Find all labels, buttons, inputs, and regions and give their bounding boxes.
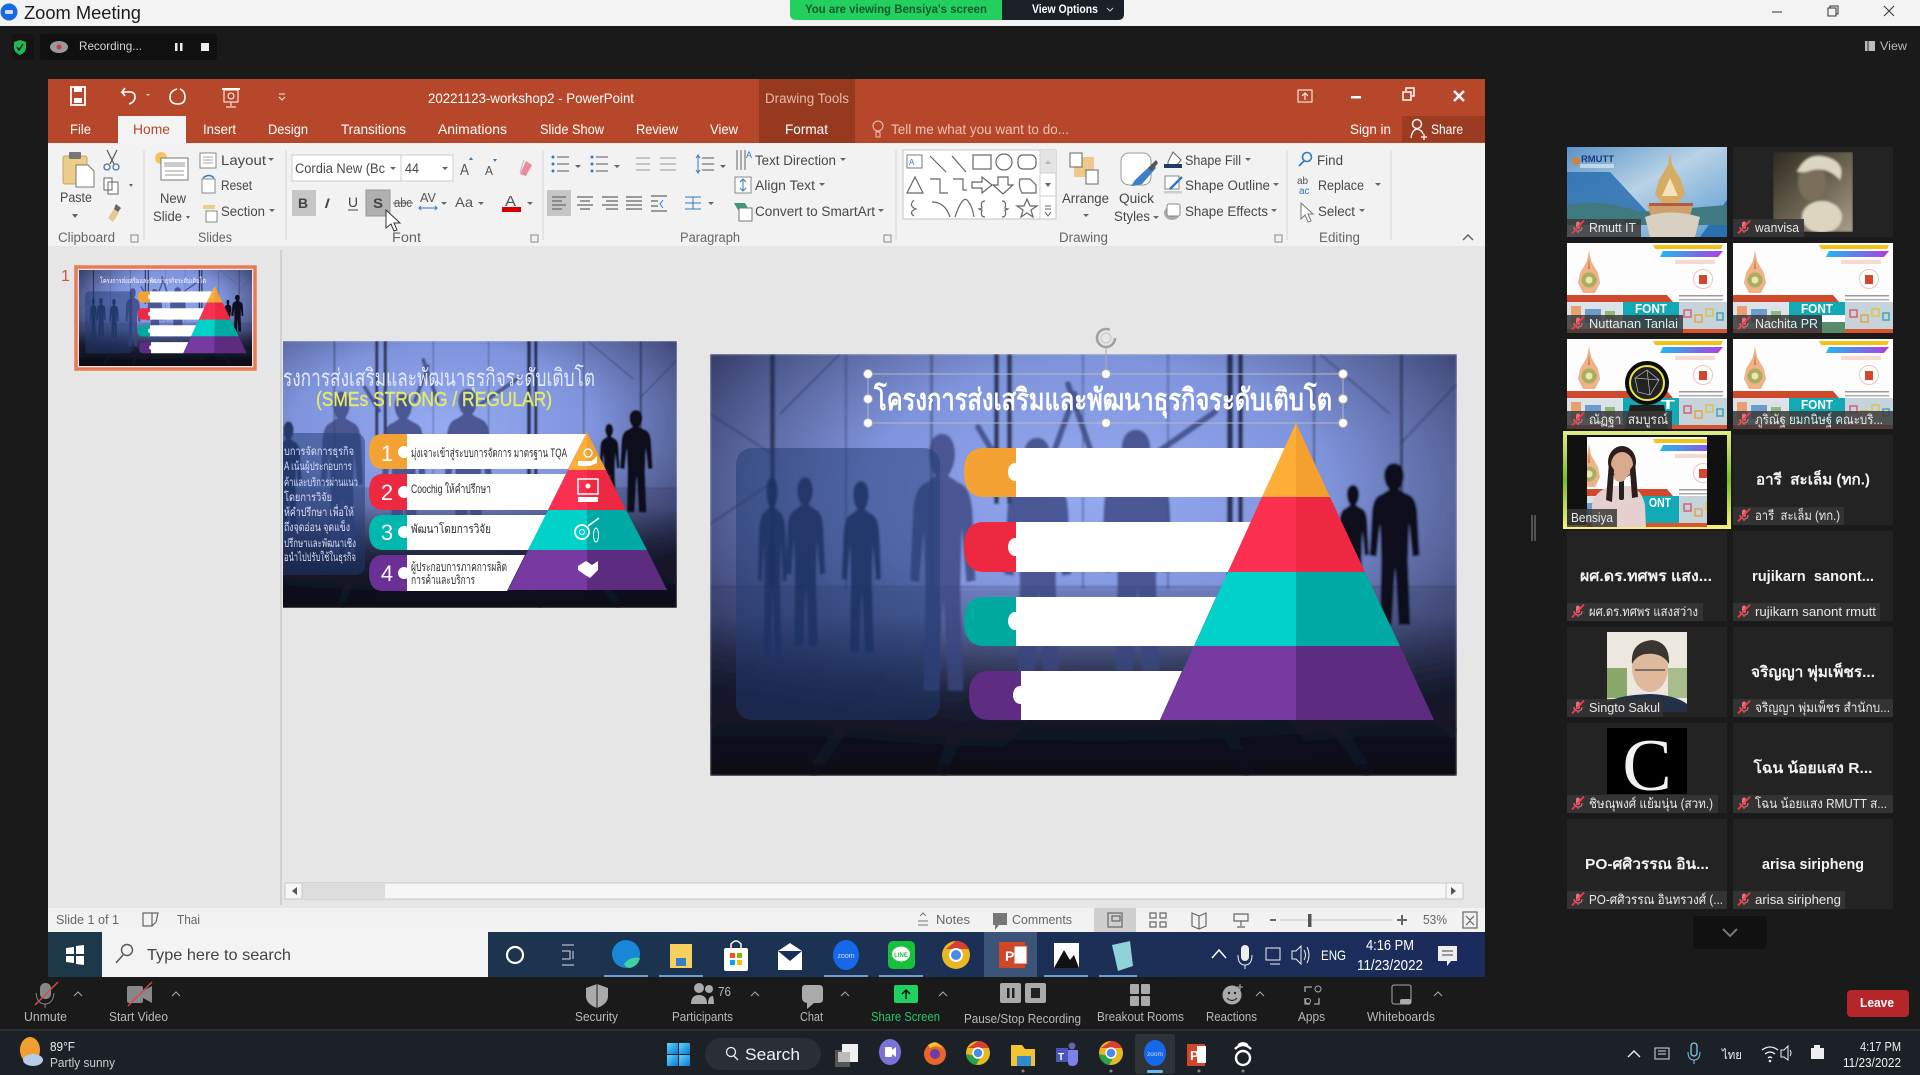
tile: ณัฏฐา สมบูรณ์: ณัฏฐา สมบูรณ์ [1589,412,1668,428]
slide thumbnail [61,267,255,369]
tile: Nachita PR [1733,243,1893,333]
participant gallery [1565,147,1893,949]
tile: ชิษณุพงศ์: C [1622,725,1672,807]
powerpoint title bar [48,79,1485,143]
ribbon tabs: Insert [203,121,236,137]
shape outline: Shape Outline [1185,178,1270,193]
share screen: Share Screen [871,1010,940,1024]
panel: description: ถึงจุดอ่อน จุดแข็ง [284,519,350,534]
tile: Nuttanan Tanlai: FONT [1635,301,1667,316]
tile: ภูริณัฐ: ภูริณัฐ ยมกนิษฐ์ คณะบริ... [1755,412,1883,428]
arrange button: Arrange [1062,191,1109,206]
pinned apps: P [1190,1048,1199,1063]
weather widget: Partly sunny [50,1056,116,1070]
tile: Rmutt IT: Rmutt IT [1589,220,1636,235]
pinned apps: zoom [1147,1051,1163,1058]
tile: wanvisa: wanvisa [1754,220,1800,235]
zoom title bar [0,0,1920,26]
powerpoint status bar: Notes [936,912,970,927]
tile: อารี สะเล็ม [1733,435,1893,525]
paragraph group: Text Direction [755,153,836,168]
slide title: โครงการส่งเสริมและพัฒนาธุรกิจระดับเติบโต [873,381,1332,419]
quick styles button: Styles [1114,209,1150,224]
viewing banner: View Options [1032,2,1098,16]
tile: wanvisa [1733,147,1893,237]
tile: Rmutt IT [1567,147,1727,237]
tile: arisa siripheng: arisa siripheng [1755,892,1841,907]
step numbers: 1 [381,441,393,466]
paragraph group: A [746,150,752,160]
step labels: พัฒนาโดยการวิจัย [411,522,491,536]
pyramid infographic [736,423,1434,720]
tile: ภูริณัฐ: FONT [1801,397,1833,412]
windows start logo [667,1043,690,1066]
step labels: ผู้ประกอบการภาคการผลิต [411,560,507,575]
viewing banner [790,0,1124,20]
powerpoint status bar: Thai [177,912,200,927]
clipboard group: Clipboard [58,230,115,245]
whiteboards: Whiteboards [1367,1010,1435,1024]
step labels: การค้าและบริการ [411,573,475,587]
tile: Singto Sakul [1567,627,1727,717]
taskbar app icons: P [1005,948,1014,964]
tile: Bensiya active speaker: Bensiya [1571,510,1614,525]
powerpoint status bar [48,908,1485,932]
slides group: New [160,191,186,206]
panel: description: ห้คำปรึกษา เพื่อให้ [284,504,354,519]
security: Security [575,1010,619,1024]
paragraph group: Align Text [755,178,815,193]
apps [1298,986,1325,1024]
tile: ผศ.ดร.ทศพร [1567,531,1727,621]
quick styles button: Quick [1119,191,1154,206]
weather widget [20,1037,116,1070]
reactions: Reactions [1206,1010,1257,1024]
panel: description [283,433,365,575]
clipboard group [58,150,138,245]
tile: Nuttanan Tanlai [1567,243,1727,333]
start video: Start Video [109,1010,168,1024]
tile: PO-ศศิวรรณ [1567,819,1727,909]
slide workspace [48,246,1485,908]
ribbon tabs: Animations [438,121,507,137]
quick styles button [1114,153,1159,224]
editing group: Select [1318,204,1355,219]
panel: description: A เน้นผู้ประกอบการ [284,460,352,473]
recording indicator [12,34,217,60]
powerpoint status bar: Comments [1012,912,1072,927]
view button [1865,41,1908,53]
slide thumbnail: โครงการส่งเสริมและพัฒนาธุรกิจระดับเติบโต [100,276,206,285]
selection frame [864,329,1348,428]
tile: ณัฏฐา สมบูรณ์: T [1661,397,1675,412]
security [575,984,619,1024]
slides group: Reset [221,178,252,193]
step labels: Coochig ให้คำปรึกษา [411,482,491,496]
font group: S [373,195,383,211]
zoom title bar: Zoom Meeting [24,3,141,23]
ribbon background [48,143,1485,246]
panel: description: โดยการวิจัย [284,490,332,504]
taskbar tray: 4:16 PM [1366,937,1414,954]
tile: อารี สะเล็ม: อารี สะเล็ม (ทก.) [1755,506,1840,523]
font group: Aa [455,194,473,210]
pinned apps: T [1058,1052,1064,1063]
ribbon tabs: Share [1431,121,1463,137]
heading: previous slide [283,364,595,411]
chat: Chat [800,1010,823,1024]
shape effects [1164,204,1277,220]
system tray [1628,1039,1901,1070]
drawing group: Drawing [1059,230,1108,245]
ribbon tabs [70,116,1485,143]
shape gallery: A [909,158,915,167]
ribbon tabs: View [710,121,739,137]
step numbers: 2 [381,480,393,505]
tile: arisa siripheng: arisa siripheng [1762,856,1864,873]
panel: description: อนำไปปรับใช้ในธุรกิจ [284,551,356,564]
tile: โฉน: โฉน น้อยแสง RMUTT ส... [1755,796,1887,811]
unmute [24,982,82,1024]
pause stop recording: Pause/Stop Recording [964,1012,1081,1026]
taskbar tray [1212,937,1457,974]
font group: A [505,193,516,210]
pinned apps [835,1034,1251,1074]
tile: arisa siripheng [1733,819,1893,909]
editing group: ab [1297,176,1309,187]
start button [66,945,84,965]
tile: Rmutt IT: RMUTT [1581,154,1615,164]
arrange button [1062,153,1109,217]
tile: ณัฏฐา สมบูรณ์ [1567,339,1727,429]
drawing group [903,150,1282,245]
windows 11 taskbar [0,1030,1920,1075]
clipboard group: Paste [60,190,92,205]
ribbon tabs: Transitions [341,121,406,137]
step labels: มุ่งเจาะเข้าสู่ระบบการจัดการ มาตรฐาน TQA [411,446,567,461]
slides group: Slides [198,230,232,245]
splitter handle [1532,515,1535,541]
font group: abc [394,196,412,210]
main slide [710,329,1457,776]
taskbar app icons: zoom [837,953,855,960]
heading: previous slide: รงการส่งเสริมและพัฒนาธุรกิจระดับเติบโต [283,364,595,393]
taskbar app icons: LINE [894,953,908,959]
tile: จริญญา: จริญญา พุ่มเพ็ชร สำนักบ... [1755,698,1890,716]
font group: Cordia New (Bc [295,161,385,176]
powerpoint title bar: Drawing Tools [765,91,849,106]
ribbon tabs: Review [636,121,679,137]
bars and pyramid [369,432,667,591]
start video [109,982,180,1024]
tile: rujikarn: rujikarn sanont... [1752,568,1874,585]
tile: Bensiya active speaker [1565,433,1729,527]
pyramid icons [575,449,599,578]
leave button: Leave [1860,996,1894,1010]
ribbon tabs: Sign in [1350,121,1391,137]
viewing banner: You are viewing Bensiya's screen [805,2,987,16]
font group: I [324,195,330,211]
step numbers [381,446,392,581]
powerpoint status bar: 53% [1423,912,1447,927]
system tray: 4:17 PM [1860,1039,1901,1054]
zoom toolbar [24,982,1909,1026]
heading: previous slide: (SMEs STRONG / REGULAR) [316,389,552,411]
slides group: Layout [221,153,266,168]
paragraph group: Convert to SmartArt [755,204,875,219]
tile: Nuttanan Tanlai: Nuttanan Tanlai [1589,316,1678,331]
participants: 76 [718,985,731,999]
taskbar app icons [507,940,1137,977]
slides group [153,152,275,245]
search box text: Type here to search [147,947,291,964]
tile: ผศ.ดร.ทศพร: ผศ.ดร.ทศพร แสงสว่าง [1589,604,1698,619]
tile: จริญญา: จริญญา พุ่มเพ็ชร... [1751,662,1875,682]
tile: Nachita PR: FONT [1801,301,1833,316]
font group: U [348,194,358,210]
step labels [411,446,567,587]
search pill: Search [745,1045,800,1064]
editing group: Editing [1319,230,1360,245]
taskbar tray: 11/23/2022 [1357,957,1423,974]
slide thumbnail: 1 [61,268,70,285]
panel: description: บการจัดการธุรกิจ [284,445,354,458]
apps: Apps [1298,1010,1325,1024]
tile: ชิษณุพงศ์: ชิษณุพงศ์ แย้มนุ่น (สวท.) [1589,796,1713,812]
tile: โฉน [1733,723,1893,813]
panel: description: ค้าและบริการผ่านแนว [284,476,358,489]
tile: ภูริณัฐ [1733,339,1893,429]
editing group: Replace [1318,178,1364,193]
reactions [1206,984,1264,1024]
editing group: Find [1317,153,1343,168]
tile: Bensiya active speaker: ONT [1649,495,1671,510]
weather widget: 89°F [50,1040,75,1054]
tile: rujikarn [1733,531,1893,621]
editing group: ac [1299,186,1310,197]
shape fill [1164,152,1251,168]
step numbers: 4 [381,561,393,586]
font group: Font [392,230,421,245]
mouse cursor [386,210,400,231]
tile: ผศ.ดร.ทศพร: ผศ.ดร.ทศพร แสง... [1580,568,1712,585]
tile: จริญญา [1733,627,1893,717]
font group: A [460,162,469,179]
search pill [705,1038,821,1070]
pause stop recording [964,983,1081,1026]
taskbar tray: ENG [1321,947,1346,963]
editing group [1297,152,1473,245]
tile: โฉน: โฉน น้อยแสง R... [1752,758,1872,777]
font group: B [298,195,308,211]
tile: ชิษณุพงศ์ [1567,723,1727,813]
horizontal scrollbar [285,883,1463,899]
ribbon tabs: Home [133,121,170,137]
shape effects: Shape Effects [1185,204,1268,219]
font group [292,155,538,245]
tile: Nachita PR: Nachita PR [1755,316,1818,331]
breakout rooms [1097,984,1184,1024]
system tray: ไทย [1721,1048,1742,1062]
ribbon tabs: Tell me what you want to do... [891,121,1069,137]
powerpoint title bar: 20221123-workshop2 - PowerPoint [428,90,634,106]
recording indicator: Recording... [79,39,142,53]
slides group: Section [221,204,265,219]
share screen [871,985,947,1024]
slides group: Slide [153,209,182,224]
system tray: 11/23/2022 [1843,1055,1901,1070]
shape outline [1164,176,1279,194]
whiteboards [1367,985,1442,1024]
participants: Participants [672,1010,733,1024]
view button: View [1880,41,1908,53]
unmute: Unmute [24,1010,67,1024]
shape fill: Shape Fill [1185,153,1241,168]
chat [800,985,849,1024]
tile: อารี สะเล็ม: อารี สะเล็ม (ทก.) [1756,470,1870,488]
ribbon tabs: Slide Show [540,121,605,137]
ribbon tabs: Format [785,121,828,137]
font group: 44 [405,161,419,176]
participants [672,983,759,1024]
tile: PO-ศศิวรรณ: PO-ศศิวรรณ อิน... [1585,855,1709,873]
tile: rujikarn: rujikarn sanont rmutt [1755,604,1876,619]
gallery scroll down button [1693,916,1767,949]
shared windows taskbar [48,932,1485,977]
ribbon tabs: Design [268,121,308,137]
font group: A [485,163,493,178]
breakout rooms: Breakout Rooms [1097,1010,1184,1024]
paragraph group: Paragraph [680,230,740,245]
tile: Singto Sakul: Singto Sakul [1589,700,1660,715]
font group: AV [420,190,436,205]
panel: description: ปรึกษาและพัฒนาเชิง [284,537,356,550]
paragraph group [547,150,891,245]
tile: PO-ศศิวรรณ: PO-ศศิวรรณ อินทรวงศ์ (... [1589,892,1723,907]
previous slide off-canvas [283,341,677,608]
powerpoint status bar: Slide 1 of 1 [56,912,119,927]
shape gallery [903,150,1056,219]
leave button [1847,990,1909,1017]
step numbers: 3 [381,520,393,545]
ribbon tabs: File [70,121,91,137]
